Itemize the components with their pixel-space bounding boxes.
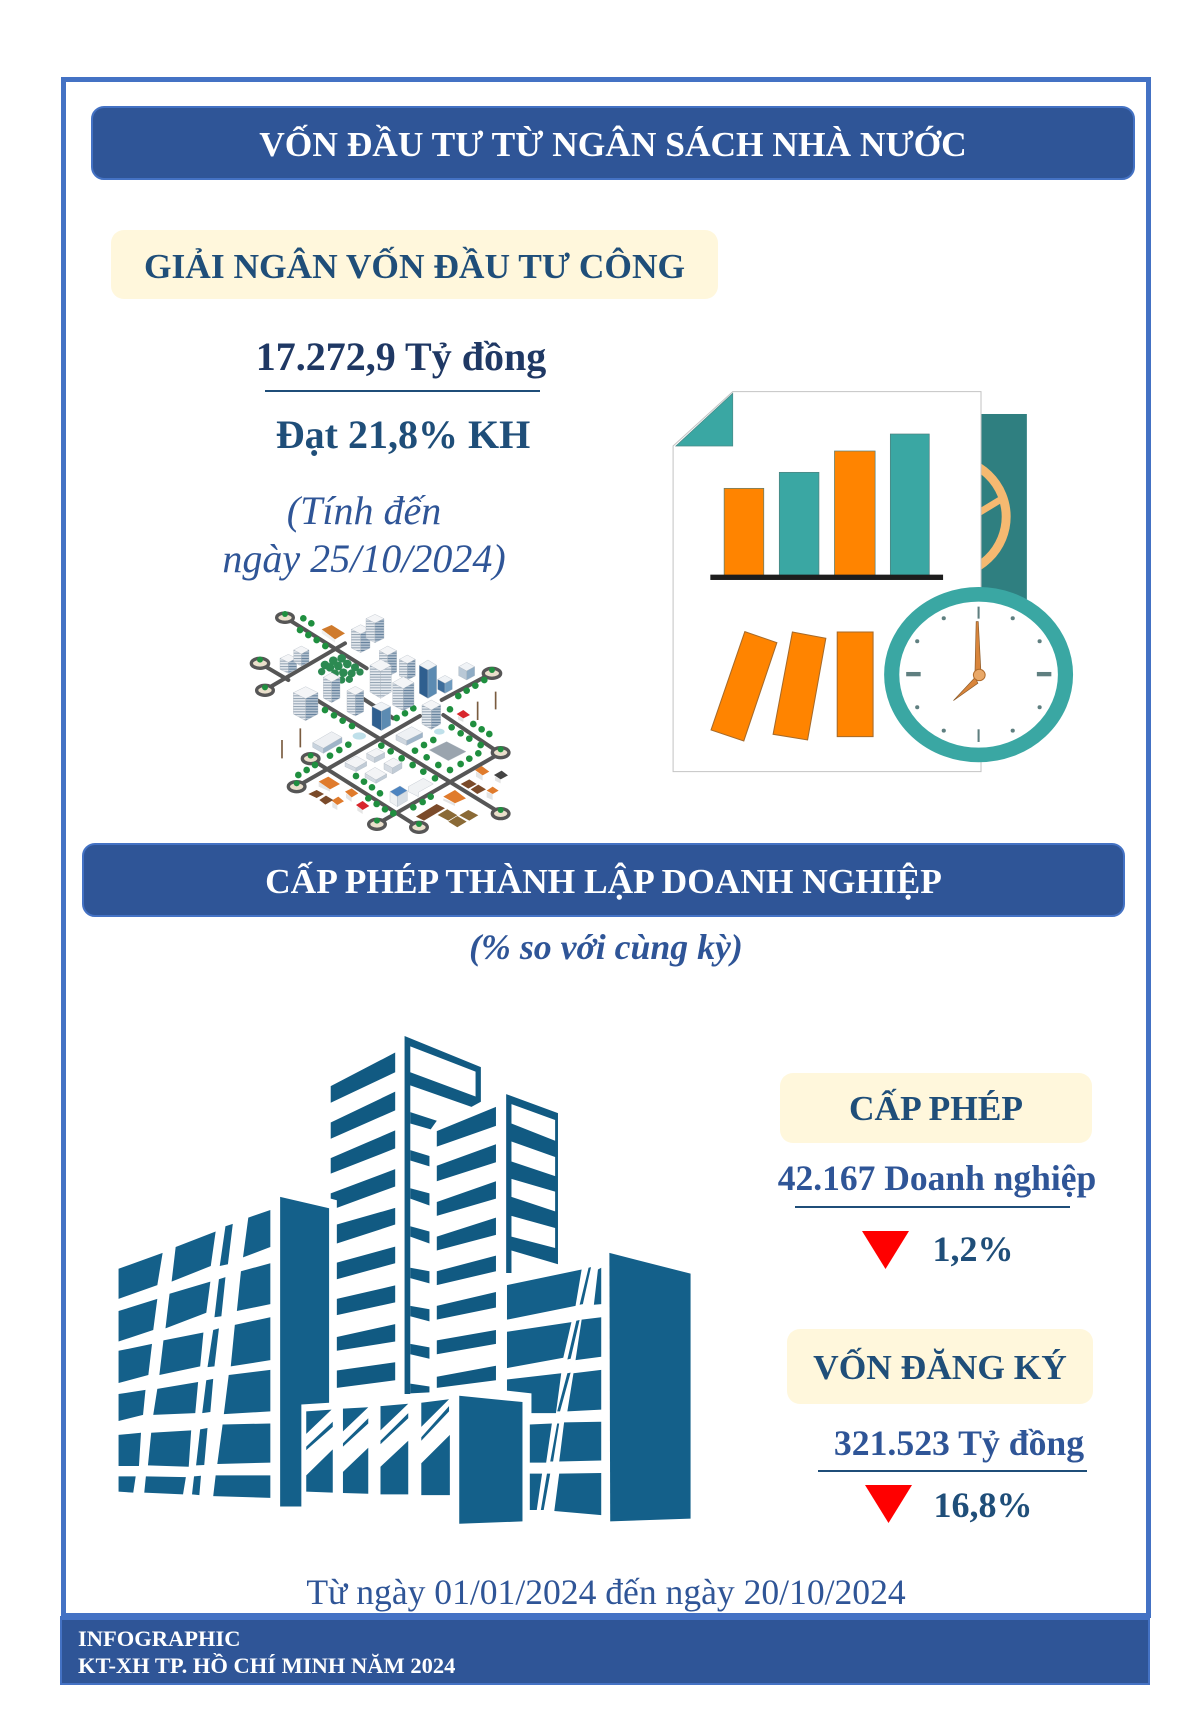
value: percent of plan: Đạt 21,8% KH <box>276 412 530 457</box>
value underline <box>795 1206 1070 1208</box>
subheading: licensing <box>780 1073 1092 1143</box>
heading: state budget investment <box>91 106 1135 180</box>
houses and fields <box>308 625 508 827</box>
value: capital amount: 321.523 Tỷ đồng <box>834 1423 1084 1463</box>
footer text: KT-XH TP. HỒ CHÍ MINH NĂM 2024 <box>78 1653 455 1678</box>
note: as of date: (Tính đến <box>287 488 441 533</box>
footer text <box>78 1626 455 1678</box>
note: as of date: ngày 25/10/2024) <box>222 536 506 581</box>
value: capital change: 16,8% <box>934 1485 1032 1525</box>
heading: state budget investment: VỐN ĐẦU TƯ TỪ NGÂN SÁCH NHÀ NƯỚC <box>259 124 967 164</box>
value: number of enterprises: 42.167 Doanh nghiệp <box>778 1158 1096 1198</box>
subheading: public investment disbursement: GIẢI NGÂN VỐN ĐẦU TƯ CÔNG <box>144 246 685 286</box>
footer text: INFOGRAPHIC <box>78 1626 240 1651</box>
heading: business registration <box>82 843 1125 917</box>
value underline <box>818 1470 1087 1472</box>
value underline <box>265 390 540 392</box>
footer band <box>60 1616 1150 1685</box>
subtitle: percent vs same period: (% so với cùng kỳ) <box>469 927 743 967</box>
subheading: licensing: CẤP PHÉP <box>849 1088 1023 1128</box>
value: disbursed amount: 17.272,9 Tỷ đồng <box>256 334 546 379</box>
icon: down arrow <box>862 1231 909 1269</box>
date range note: Từ ngày 01/01/2024 đến ngày 20/10/2024 <box>306 1572 906 1612</box>
subheading: registered capital: VỐN ĐĂNG KÝ <box>813 1347 1067 1387</box>
note: as of date <box>222 488 506 581</box>
heading: business registration: CẤP PHÉP THÀNH LẬP DOANH NGHIỆP <box>265 861 942 901</box>
value: licensing change: 1,2% <box>932 1229 1014 1269</box>
subheading: registered capital <box>787 1329 1093 1404</box>
icon: down arrow <box>865 1485 912 1523</box>
subheading: public investment disbursement <box>111 230 718 299</box>
